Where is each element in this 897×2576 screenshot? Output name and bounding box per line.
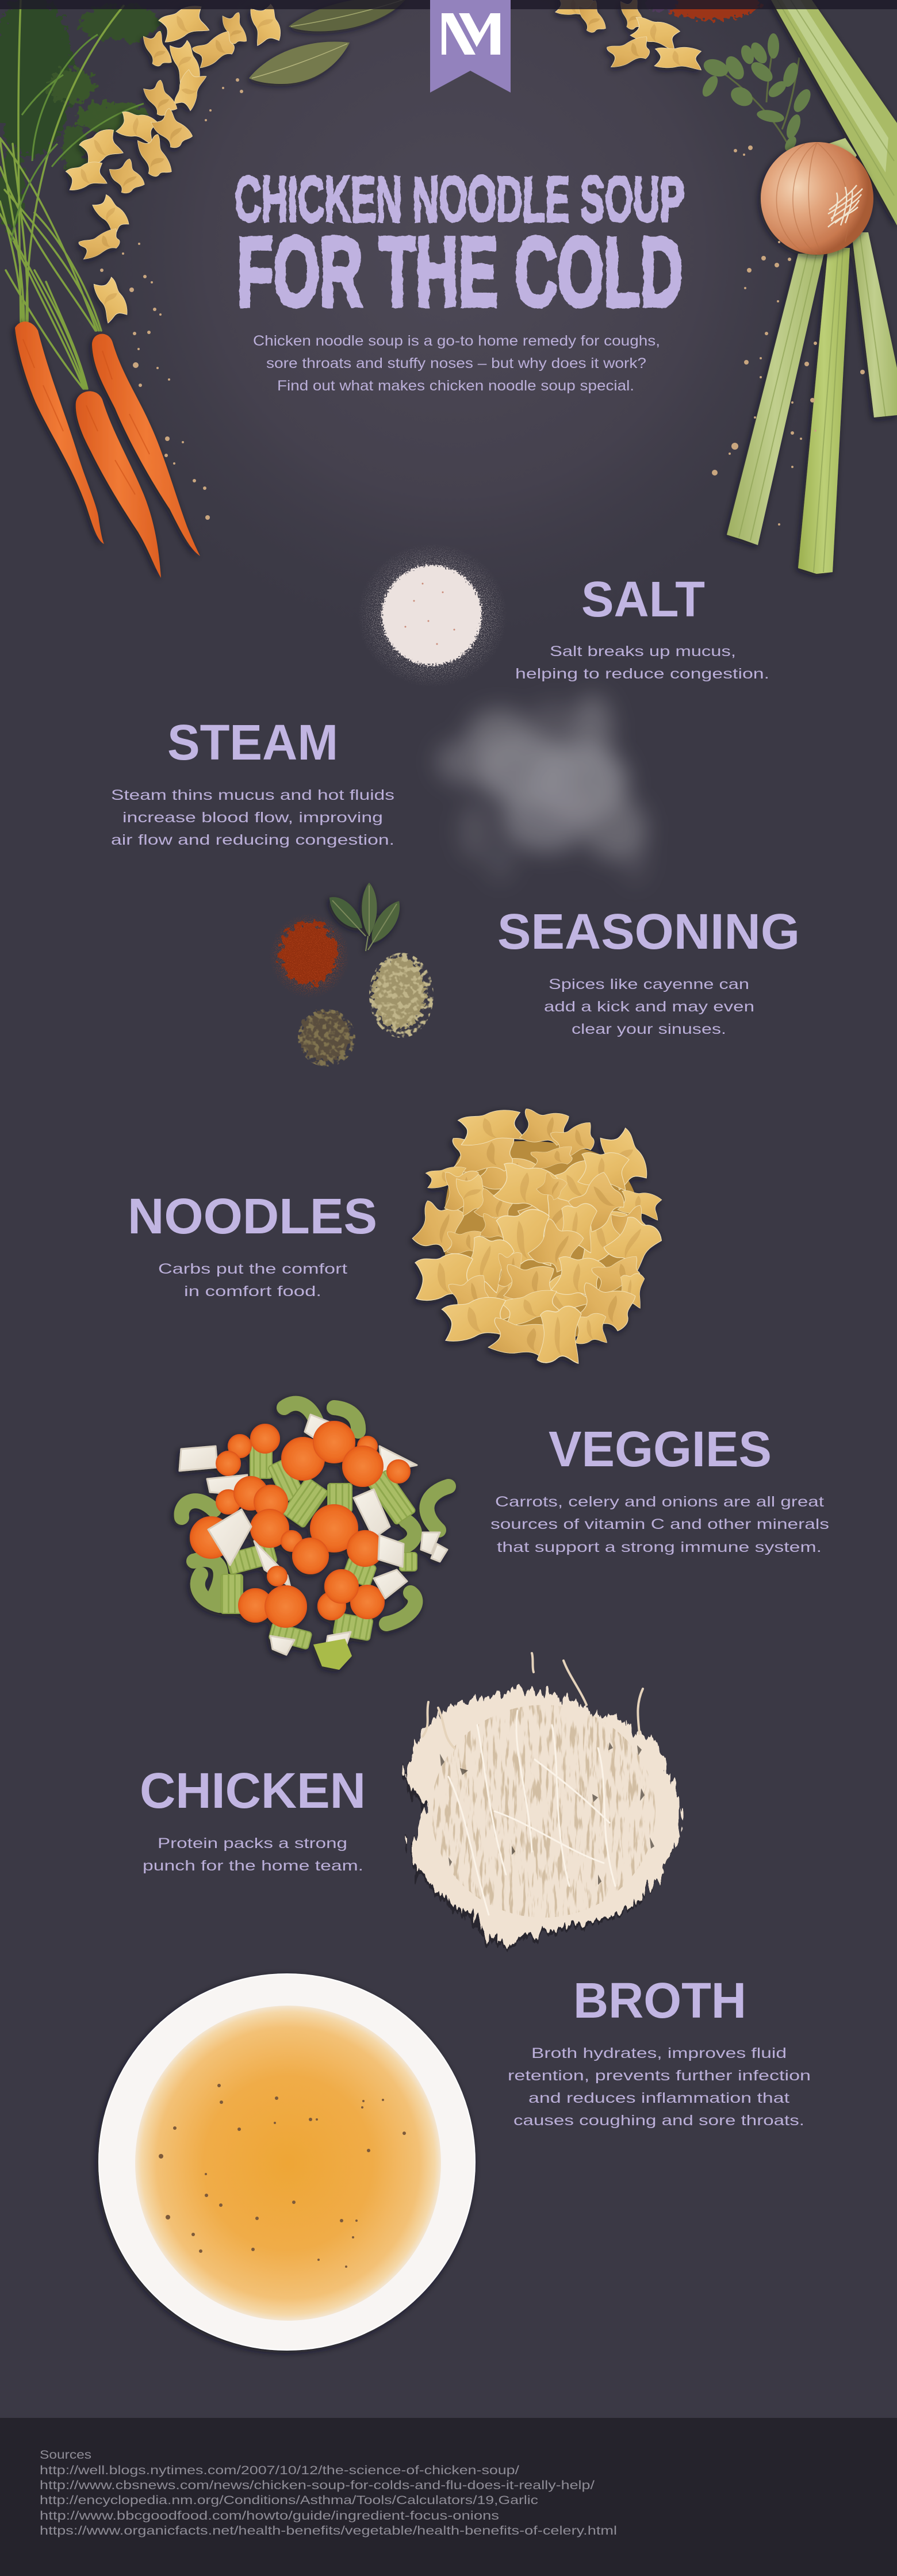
onion [761,142,873,255]
shredded chicken [403,1653,682,1947]
steam text: Steam thins mucus and hot fluids [111,787,394,803]
noodles heading: NOODLES [128,1189,377,1244]
intro text: Chicken noodle soup is a go-to home remedy for coughs, [253,333,660,349]
sources: http://well.blogs.nytimes.com/2007/10/12/the-science-of-chicken-soup/ [40,2464,519,2477]
chicken heading: CHICKEN [140,1763,366,1819]
seasoning heading: SEASONING [497,904,800,960]
logo ribbon [430,0,511,93]
veggies text [490,1494,829,1555]
seasoning text: clear your sinuses. [572,1021,726,1037]
broth text: Broth hydrates, improves fluid [531,2045,787,2061]
intro text [253,333,660,394]
top dark band [0,0,897,9]
steam text [111,787,394,848]
broth text: and reduces inflammation that [528,2090,789,2106]
steam text: air flow and reducing congestion. [111,832,394,848]
noodle pile [411,1107,666,1366]
veggies text: sources of vitamin C and other minerals [490,1516,829,1532]
veggies text: Carrots, celery and onions are all great [495,1494,824,1510]
salt pile [358,543,507,687]
sources: http://www.bbcgoodfood.com/howto/guide/ingredient-focus-onions [40,2509,499,2523]
crumbs left [100,78,243,520]
noodles text: in comfort food. [184,1283,321,1300]
oregano sprig [699,33,814,153]
steam cloud [436,695,648,885]
intro text: sore throats and stuffy noses – but why does it work? [266,355,646,371]
seasoning text [544,976,754,1037]
steam text: increase blood flow, improving [122,810,383,826]
broth text [508,2045,811,2129]
broth text: retention, prevents further infection [508,2068,811,2084]
dark herb pile [298,1009,355,1067]
chicken text: punch for the home team. [143,1858,363,1874]
veggies pile [179,1404,448,1670]
chicken text: Protein packs a strong [158,1835,347,1851]
noodles text [158,1261,347,1300]
veggies text: that support a strong immune system. [497,1539,822,1555]
sources: https://www.organicfacts.net/health-benefits/vegetable/health-benefits-of-celery.html [40,2524,617,2537]
veggies heading: VEGGIES [549,1421,772,1477]
broth bowl [99,1974,475,2350]
carrots [15,321,200,578]
broth heading: BROTH [573,1973,746,2029]
noodles text: Carbs put the comfort [158,1261,347,1277]
broth text: causes coughing and sore throats. [513,2113,804,2129]
salt text: helping to reduce congestion. [515,666,769,682]
crumbs right [712,145,865,526]
paprika and top-right noodles [554,0,761,71]
steam heading: STEAM [167,715,338,770]
sources: http://www.cbsnews.com/news/chicken-soup-for-colds-and-flu-does-it-really-help/ [40,2479,595,2492]
chicken text [143,1835,363,1874]
salt text [515,643,769,682]
seasoning text: add a kick and may even [544,999,754,1015]
cayenne pile [269,913,350,998]
top-left egg noodles [65,3,282,323]
intro text: Find out what makes chicken noodle soup special. [277,378,634,394]
carrot foliage and stems [0,0,161,389]
celery stalks [727,0,897,574]
bay leaves [249,0,407,84]
tan herb pile [369,953,434,1038]
sources: http://encyclopedia.nm.org/Conditions/Asthma/Tools/Calculators/19,Garlic [40,2494,538,2507]
seasoning leaves [329,883,400,951]
sources: Sources [40,2448,91,2462]
sources [40,2448,617,2537]
seasoning text: Spices like cayenne can [549,976,749,992]
salt text: Salt breaks up mucus, [550,643,736,660]
title [235,163,684,327]
footer band [0,2418,897,2576]
salt heading: SALT [581,572,705,627]
